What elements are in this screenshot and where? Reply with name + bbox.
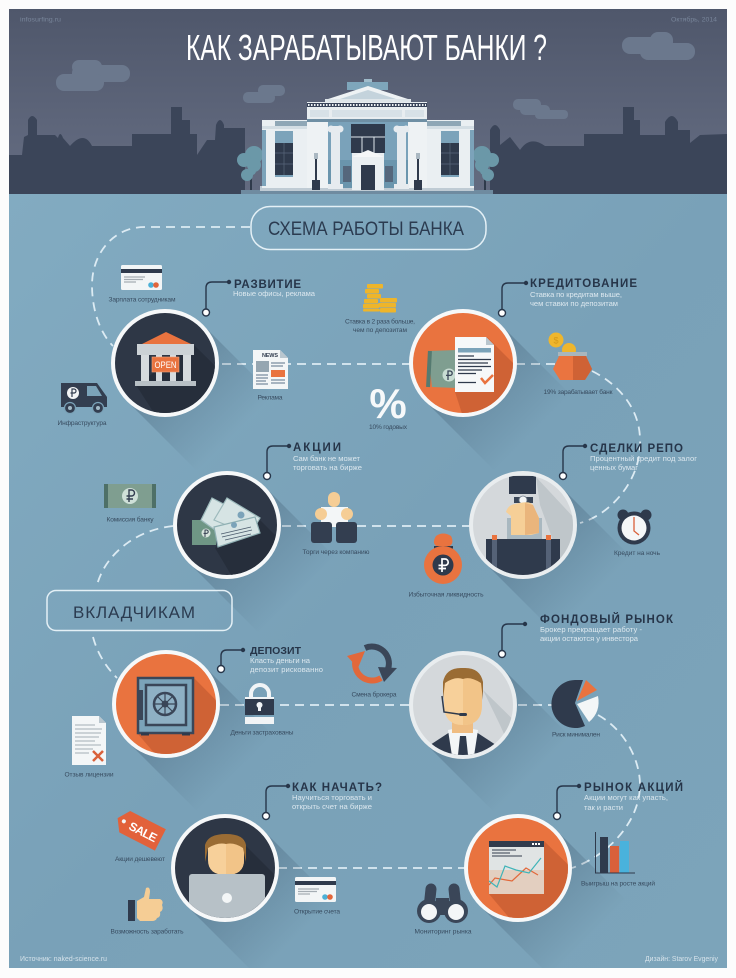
- label: 19% зарабатывает банк: [544, 388, 613, 396]
- label: 10% годовых: [369, 424, 408, 431]
- icon: banknote: [104, 484, 156, 508]
- icon: account card: [295, 877, 336, 902]
- columns: [328, 126, 410, 189]
- connector: [498, 282, 528, 316]
- icon: license document: [72, 716, 106, 765]
- heading: РАЗВИТИЕ: [234, 279, 301, 291]
- description: [590, 454, 697, 472]
- label: Открытие счета: [294, 908, 340, 916]
- pill text: ВКЛАДЧИКАМ: [73, 603, 195, 622]
- icon: newspaper: [253, 350, 288, 389]
- central block: [307, 122, 427, 188]
- description: Брокер прекращает работу -: [540, 625, 642, 634]
- description: депозит рискованно: [250, 665, 323, 674]
- label: [345, 318, 415, 334]
- icon: money bag: [424, 534, 462, 584]
- label: Реклама: [258, 394, 283, 402]
- step: как начать: [171, 782, 382, 934]
- wings: [262, 120, 307, 188]
- step: сделки репо: [469, 444, 697, 579]
- icon: pie chart: [551, 680, 599, 728]
- circle: safe: [112, 650, 220, 758]
- label: Отзыв лицензии: [64, 772, 114, 778]
- description: акции остаются у инвестора: [540, 634, 639, 643]
- skyline: [9, 107, 245, 194]
- icon: newspaper: NEWS: [262, 353, 278, 359]
- header: night city with bank: [9, 9, 727, 194]
- description: Класть деньги на: [250, 656, 311, 665]
- circle: banknotes: [173, 471, 281, 579]
- icon: truck: [61, 383, 107, 414]
- label: Мониторинг рынка: [414, 928, 472, 936]
- icon: purse with coins: [548, 332, 592, 380]
- section pill: схема работы банка: [251, 206, 486, 250]
- description: [293, 454, 362, 472]
- icon: people / broker: [311, 492, 357, 543]
- description: Научиться торговать и: [292, 793, 372, 802]
- connector: [262, 784, 290, 820]
- icon: purse with coins: $: [553, 336, 559, 346]
- description: [584, 793, 668, 812]
- description: Акции могут как упасть,: [584, 793, 668, 802]
- icon: padlock: [245, 685, 274, 724]
- description: [530, 290, 622, 308]
- connector: [498, 622, 526, 658]
- bank building: [237, 79, 499, 194]
- long shadows of circles: [127, 325, 631, 976]
- icon: thumb up: [128, 888, 163, 921]
- heading: КРЕДИТОВАНИЕ: [530, 278, 637, 290]
- date: Октябрь, 2014: [671, 16, 717, 24]
- heading: ФОНДОВЫЙ РЫНОК: [540, 613, 674, 626]
- step: депозит: [112, 647, 323, 758]
- site name: infosurfing.ru: [20, 16, 61, 24]
- step: кредитование: [409, 278, 637, 417]
- dashed flow path: [92, 227, 640, 868]
- description: чем ставки по депозитам: [530, 299, 618, 308]
- label: чем по депозитам: [353, 327, 407, 334]
- label: Комиссия банку: [106, 516, 154, 524]
- heading: КАК НАЧАТЬ?: [292, 782, 382, 794]
- heading: СДЕЛКИ РЕПО: [590, 443, 683, 455]
- icon: gold coins: [363, 284, 397, 312]
- icon: binoculars: [417, 889, 468, 923]
- label: Акции дешевеют: [115, 856, 165, 863]
- description: [250, 656, 323, 674]
- label: Деньги застрахованы: [230, 730, 294, 736]
- connector: [264, 444, 290, 480]
- title: КАК ЗАРАБАТЫВАЮТ БАНКИ ?: [186, 27, 547, 68]
- portico and door: [352, 153, 384, 190]
- connector: [202, 280, 230, 316]
- sign text: OPEN: [154, 360, 177, 371]
- circle: bank open: [111, 309, 219, 417]
- description: ценных бумаг: [590, 463, 638, 472]
- attic and roof: [364, 79, 372, 83]
- description: [540, 625, 642, 643]
- step: рынок акций: [464, 780, 682, 922]
- heading: РЫНОК АКЦИЙ: [584, 781, 683, 794]
- label: Смена брокера: [352, 690, 397, 698]
- circle: chart window: [464, 814, 572, 922]
- section pill: вкладчикам: [47, 590, 232, 630]
- description: открыть счет на бирже: [292, 802, 372, 811]
- connector: [554, 784, 580, 820]
- icon: alarm clock: [618, 510, 652, 544]
- circle: hand with briefcase: [469, 471, 577, 579]
- description: Процентный кредит под залог: [590, 454, 697, 463]
- circle: broker with headset: [409, 651, 517, 759]
- description: так и расти: [584, 803, 623, 812]
- label: Избыточная ликвидность: [408, 590, 484, 598]
- connector: [218, 648, 244, 672]
- icon: percent: %: [369, 380, 407, 427]
- description: Новые офисы, реклама: [233, 289, 316, 298]
- icon: sale tag: [112, 807, 166, 851]
- icon: bar chart: [596, 832, 635, 873]
- step: фондовый рынок: [409, 612, 673, 759]
- step: акции: [173, 442, 362, 579]
- clouds: [56, 32, 695, 119]
- step: развитие: [111, 280, 315, 417]
- frieze: [307, 102, 427, 120]
- lamps: [312, 153, 422, 190]
- description: торговать на бирже: [293, 463, 362, 472]
- connector: [560, 444, 586, 480]
- label: Кредит на ночь: [614, 550, 661, 557]
- description: Сам банк не может: [293, 454, 361, 463]
- pill text: СХЕМА РАБОТЫ БАНКА: [268, 219, 464, 240]
- poster body background: [9, 194, 727, 968]
- source: Источник: naked-science.ru: [20, 956, 107, 963]
- description: [292, 793, 372, 811]
- circle: trader with laptop: [171, 814, 279, 922]
- label: Зарплата сотрудникам: [108, 296, 176, 304]
- label: Риск минимален: [552, 732, 600, 738]
- label: Торги через компанию: [302, 549, 370, 556]
- trees: [237, 146, 499, 190]
- circle: credit document: [409, 309, 517, 417]
- icon: salary card: [121, 265, 162, 290]
- label: Ставка в 2 раза больше,: [345, 318, 415, 326]
- tag text: SALE: [126, 819, 160, 845]
- label: Выигрыш на росте акций: [581, 880, 655, 888]
- heading: ДЕПОЗИТ: [250, 645, 302, 657]
- designer credit: Дизайн: Starov Evgeniy: [645, 955, 719, 963]
- icon: swap arrows: [347, 647, 397, 682]
- description: Ставка по кредитам выше,: [530, 290, 622, 299]
- label: Инфраструктура: [58, 420, 107, 427]
- label: Возможность заработать: [110, 928, 184, 936]
- heading: АКЦИИ: [293, 442, 341, 454]
